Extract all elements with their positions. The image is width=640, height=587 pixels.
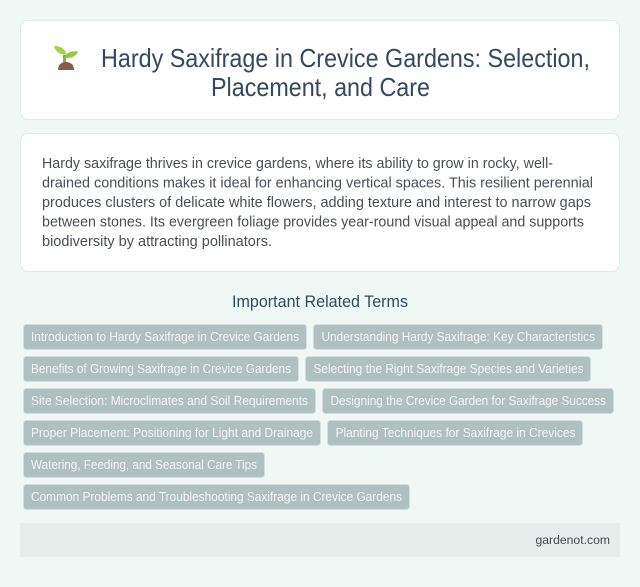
text block: description: Hardy saxifrage thrives in crevice gardens, where its ability to grow in rocky, well- (42, 155, 553, 172)
tag (24, 420, 320, 446)
tag list: related terms (24, 324, 614, 510)
tag (314, 324, 602, 350)
heading: title: Hardy Saxifrage in Crevice Gardens: Selection, (101, 45, 590, 73)
tag: Designing the Crevice Garden for Saxifrage Success (330, 394, 606, 408)
tag: Introduction to Hardy Saxifrage in Crevice Gardens (31, 330, 299, 344)
tag (322, 388, 614, 414)
heading: important related terms: Important Related Terms (232, 293, 408, 311)
tag: Proper Placement: Positioning for Light and Drainage (31, 426, 313, 440)
tag: Selecting the Right Saxifrage Species and Varieties (314, 362, 584, 376)
tag: Watering, Feeding, and Seasonal Care Tips (31, 458, 257, 472)
panel: title card (20, 20, 620, 120)
tag: Benefits of Growing Saxifrage in Crevice Gardens (31, 362, 291, 376)
tag: Common Problems and Troubleshooting Saxifrage in Crevice Gardens (31, 490, 402, 504)
footer text: source: gardenot.com (536, 533, 610, 547)
icon: sprout (54, 46, 78, 70)
footer bar (20, 523, 620, 557)
heading: title (101, 45, 590, 102)
tag (24, 484, 410, 510)
text block: description: between stones. Its evergreen foliage provides year-round visual appeal and supports (42, 214, 584, 230)
text block: description: produces clusters of delicate white flowers, adding texture and interest to narrow gaps (42, 194, 591, 211)
panel: introduction text (20, 134, 620, 272)
tag (24, 388, 316, 414)
heading: title: Placement, and Care (211, 74, 430, 102)
tag (24, 452, 264, 478)
text block: description (42, 155, 593, 250)
tag: Planting Techniques for Saxifrage in Crevices (336, 426, 576, 440)
tag: Site Selection: Microclimates and Soil Requirements (31, 394, 308, 408)
tag: Understanding Hardy Saxifrage: Key Characteristics (322, 330, 595, 344)
text block: description: drained conditions makes it ideal for enhancing vertical spaces. This resilient perennial (42, 174, 593, 192)
tag (306, 356, 590, 382)
text block: description: biodiversity by attracting pollinators. (42, 233, 272, 250)
tag (24, 356, 298, 382)
tag (328, 420, 582, 446)
tag (24, 324, 306, 350)
